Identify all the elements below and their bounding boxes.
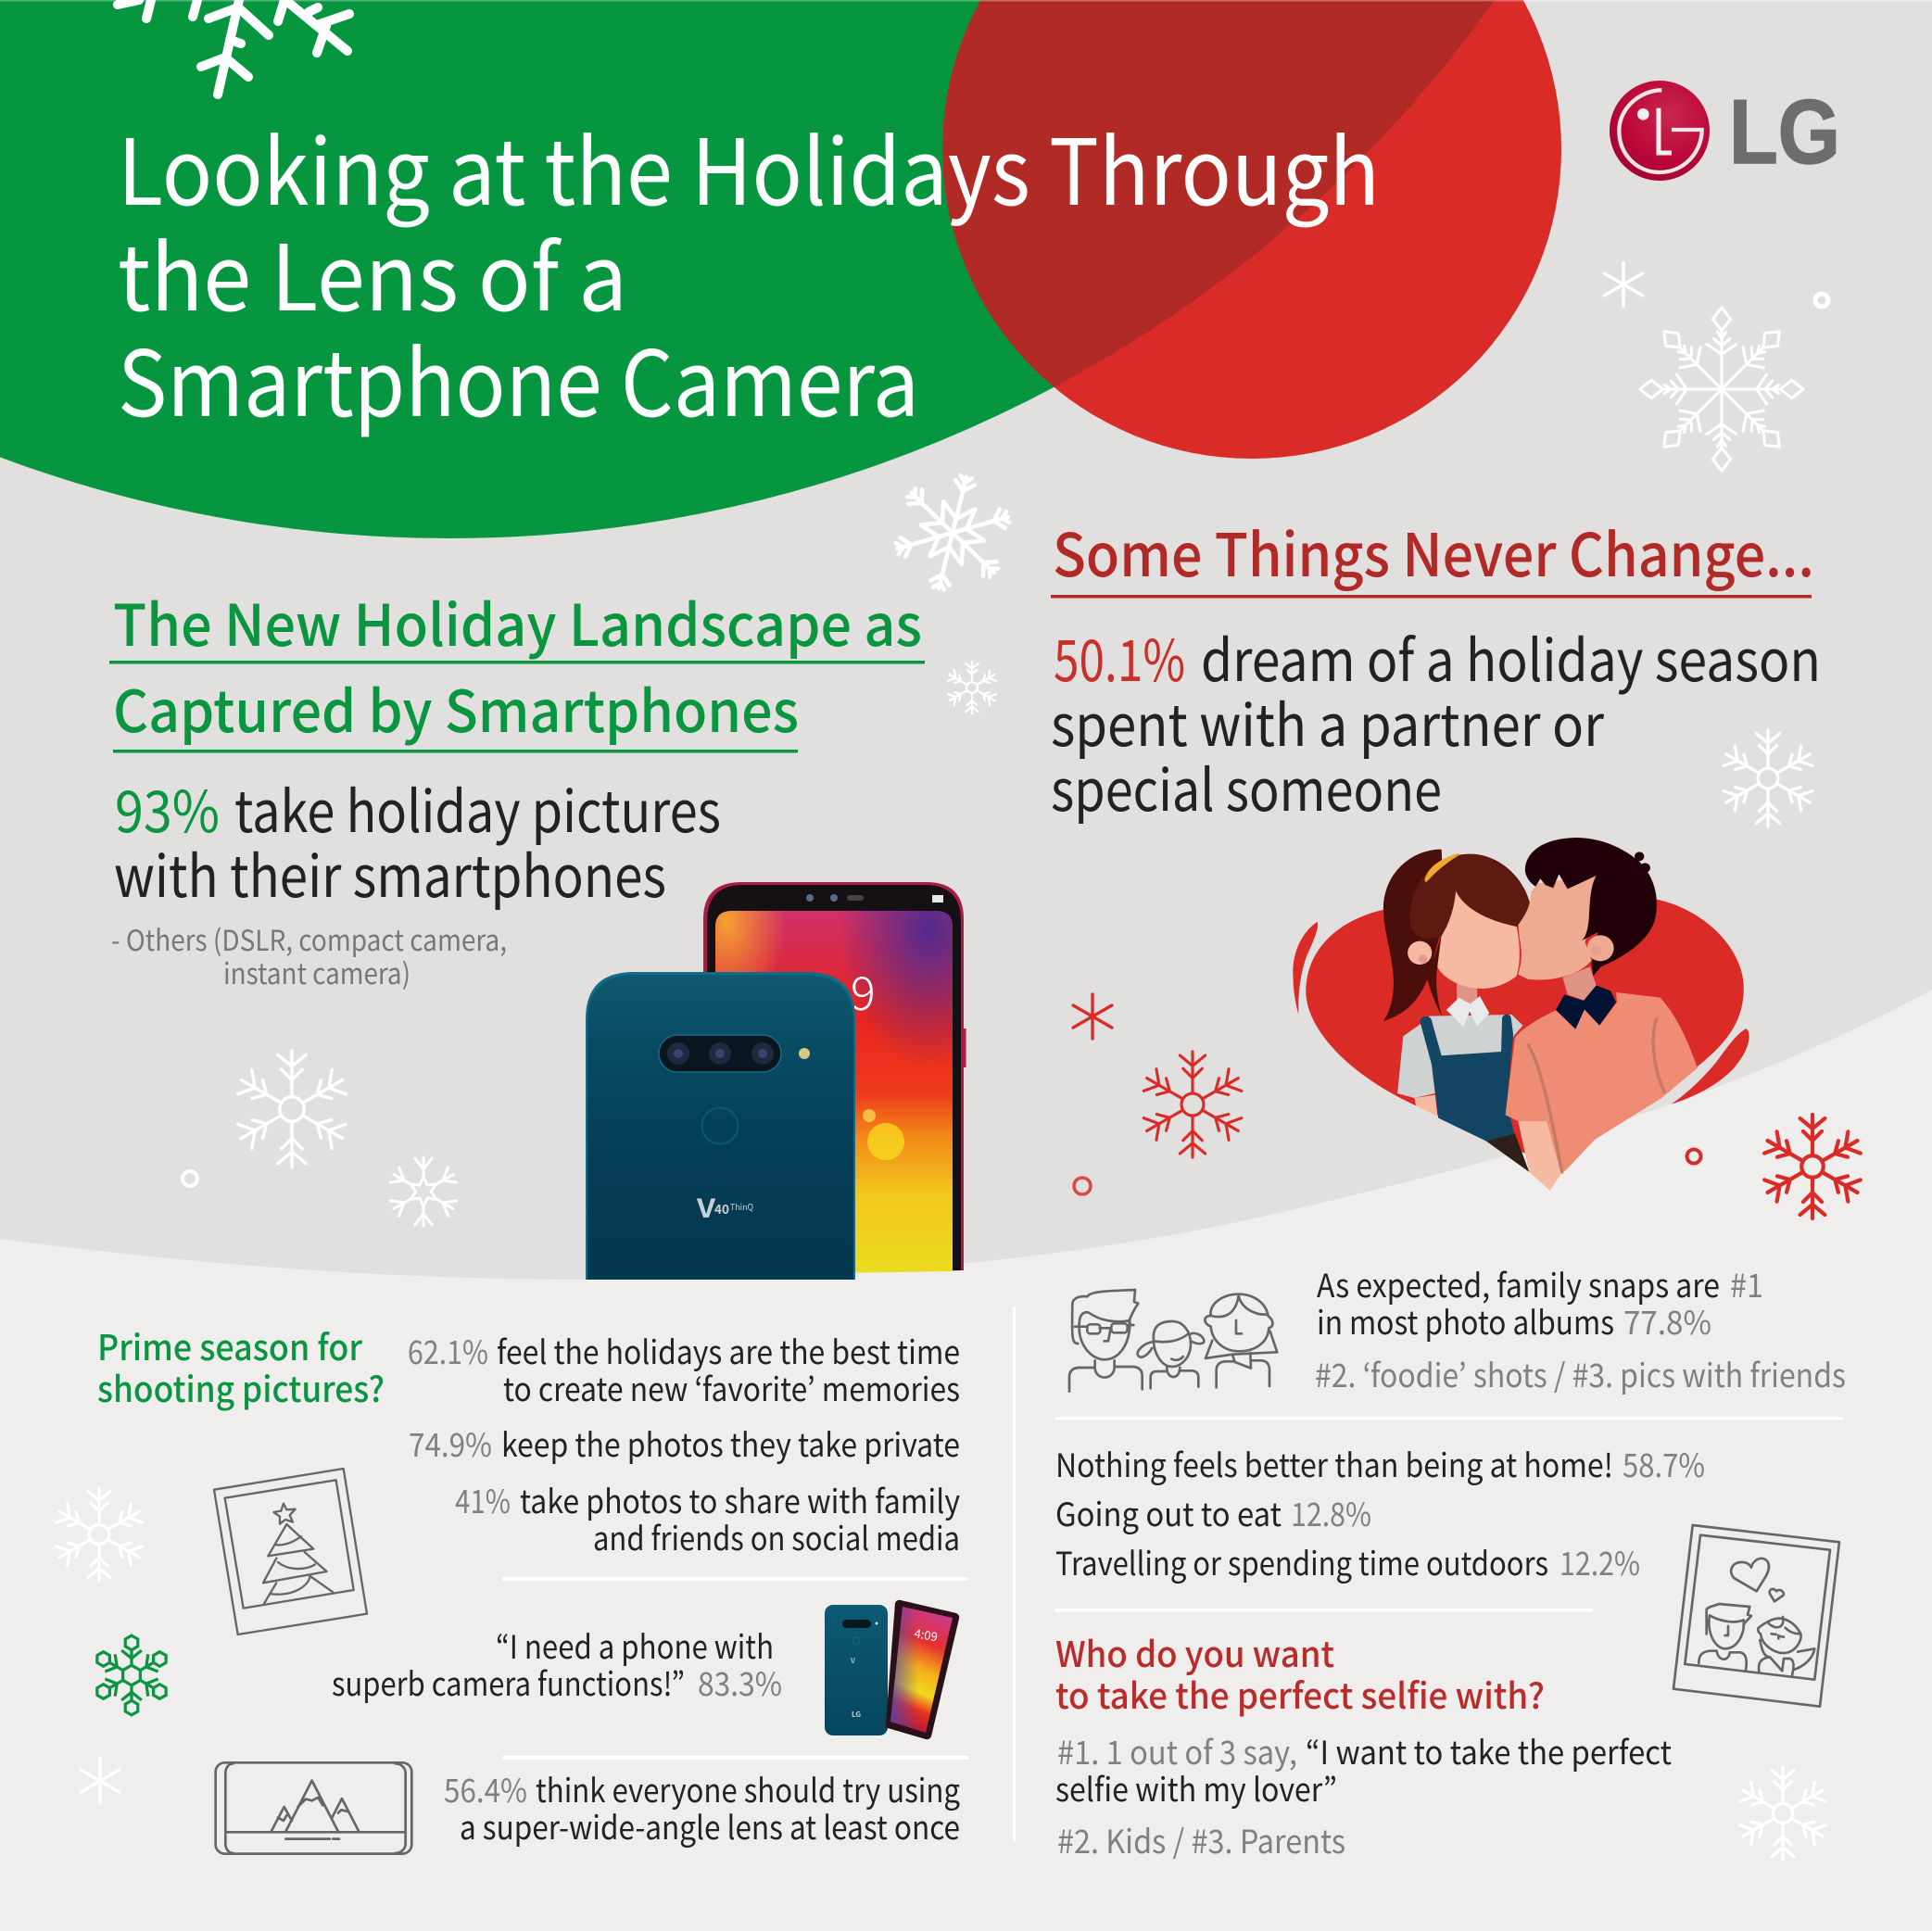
statistic: 83.3 percent quote bbox=[332, 1622, 782, 1706]
statistic: 41 percent: and friends on social media bbox=[593, 1513, 960, 1560]
heading: green two line bbox=[109, 579, 925, 752]
icon: polaroid with tree bbox=[214, 1469, 367, 1634]
statistic: 41 percent: take photos to share with family bbox=[520, 1476, 960, 1523]
statistic: 93 percent: take holiday pictures bbox=[234, 765, 721, 849]
text: family snaps: 77.8% bbox=[1623, 1297, 1711, 1344]
text: family snaps bbox=[1315, 1260, 1846, 1397]
snowflake: small lower left bbox=[389, 1157, 458, 1226]
heading: selfie question: Who do you want bbox=[1055, 1626, 1334, 1677]
statistic: 62.1 percent: to create new ‘favorite’ memories bbox=[503, 1364, 960, 1411]
snowflake: lower left bbox=[234, 1051, 349, 1167]
phone: front view bbox=[703, 882, 966, 1275]
phone: small rear: V bbox=[850, 1656, 855, 1666]
text: where people spend holidays: 58.7% bbox=[1623, 1440, 1705, 1487]
snowflake: white left bbox=[54, 1488, 145, 1581]
text: where people spend holidays bbox=[1055, 1440, 1705, 1585]
heading: prime season bbox=[97, 1319, 385, 1412]
header: green and red overlapping circles bbox=[0, 0, 1932, 538]
phones: V40 front and back bbox=[586, 882, 966, 1280]
asterisk: white left bbox=[81, 1759, 120, 1803]
snowflake: large ornate bbox=[1640, 308, 1803, 471]
text: where people spend holidays: Travelling or spending time outdoors bbox=[1055, 1538, 1548, 1585]
text: family snaps: #1 bbox=[1730, 1260, 1763, 1307]
statistic: 56.4 percent bbox=[444, 1765, 960, 1849]
heart bbox=[1306, 899, 1744, 1165]
phone: small rear: LG bbox=[852, 1710, 861, 1720]
statistic: 56.4 percent: 56.4% bbox=[444, 1765, 527, 1812]
icon: family bbox=[1069, 1290, 1277, 1392]
text: family snaps: As expected, family snaps are bbox=[1317, 1260, 1720, 1307]
heading: selfie question: to take the perfect selfie with? bbox=[1055, 1668, 1545, 1719]
phone: rear view: 40 bbox=[714, 1200, 729, 1218]
statistic: 56.4 percent: think everyone should try using bbox=[536, 1765, 960, 1812]
phone: rear view: ThinQ bbox=[730, 1201, 753, 1213]
phone: rear view: V bbox=[696, 1189, 716, 1226]
icon: polaroid with couple bbox=[1673, 1525, 1839, 1707]
title: the Lens of a bbox=[118, 206, 627, 337]
statistic: 74.9 percent: keep the photos they take private bbox=[501, 1420, 960, 1467]
statistic: 41 percent: 41% bbox=[455, 1476, 511, 1523]
title: Looking at the Holidays Through bbox=[118, 100, 1380, 232]
figures bbox=[1383, 838, 1698, 1191]
dot: lower left bbox=[183, 1171, 197, 1186]
red decorations bbox=[1073, 994, 1863, 1218]
heading: prime season: Prime season for bbox=[97, 1319, 362, 1370]
text: selfie answers bbox=[1055, 1727, 1672, 1863]
snowflake: white bottom right bbox=[1737, 1767, 1828, 1860]
logo wordmark: LG bbox=[1729, 81, 1840, 183]
note: other cameras: - Others (DSLR, compact camera, bbox=[111, 917, 507, 959]
statistic: 50.1 percent: special someone bbox=[1051, 744, 1442, 827]
icon: landscape phone with mountains bbox=[216, 1762, 411, 1854]
snowflake: red centre bbox=[1141, 1052, 1244, 1157]
icon: LG face mark bbox=[1610, 81, 1710, 181]
dot: red right bbox=[1686, 1149, 1701, 1164]
illustration: kissing couple in a heart bbox=[1293, 838, 1749, 1191]
snowflake: small beside left heading bbox=[946, 662, 998, 713]
asterisk: top right bbox=[1604, 262, 1643, 307]
phone: small front tilted bbox=[886, 1600, 959, 1739]
text: where people spend holidays: 12.2% bbox=[1559, 1538, 1640, 1585]
text: family snaps: #2. ‘foodie’ shots / #3. pics with friends bbox=[1315, 1350, 1846, 1397]
swoosh right bbox=[1672, 1029, 1749, 1104]
statistic: 74.9 percent: 74.9% bbox=[409, 1420, 492, 1467]
top snowflake, cropped by page edge bbox=[118, 0, 349, 95]
LG logo bbox=[1610, 81, 1840, 183]
white snowflakes upper area bbox=[183, 262, 1828, 1226]
statistic: 83.3 percent quote: superb camera functions!” bbox=[332, 1659, 685, 1706]
girl bbox=[1383, 850, 1531, 1172]
statistic: 56.4 percent: a super-wide-angle lens at least once bbox=[460, 1802, 960, 1849]
statistic: 83.3 percent quote: “I need a phone with bbox=[496, 1622, 774, 1669]
statistic: 62.1 percent bbox=[408, 1327, 960, 1411]
statistic: 41 percent bbox=[455, 1476, 960, 1560]
phone: front view: 9 bbox=[851, 957, 876, 1024]
note: other cameras bbox=[111, 917, 507, 992]
text: selfie answers: #1. 1 out of 3 say, bbox=[1057, 1727, 1297, 1774]
phone: small rear bbox=[825, 1605, 888, 1735]
text: where people spend holidays: 12.8% bbox=[1291, 1489, 1371, 1536]
phone: rear view bbox=[586, 972, 855, 1280]
text: where people spend holidays: Going out to eat bbox=[1055, 1489, 1282, 1536]
asterisk: red bbox=[1073, 994, 1112, 1039]
note: other cameras: instant camera) bbox=[223, 951, 410, 992]
dot: top right bbox=[1815, 294, 1828, 307]
boy bbox=[1506, 838, 1698, 1191]
panel: some things never change bbox=[1051, 509, 1821, 827]
title bbox=[118, 100, 1380, 443]
statistic: 50.1 percent bbox=[1051, 614, 1821, 827]
heading: green two line: Captured by Smartphones bbox=[113, 665, 799, 749]
statistic: 50.1 percent: 50.1% bbox=[1054, 614, 1185, 698]
lower light section with curved edge bbox=[0, 990, 1932, 1931]
heading: selfie question bbox=[1055, 1626, 1545, 1719]
text: selfie answers: #2. Kids / #3. Parents bbox=[1057, 1816, 1345, 1863]
heading: green two line: The New Holiday Landscape as bbox=[113, 579, 922, 663]
dot: red left bbox=[1074, 1178, 1091, 1194]
text: selfie answers: selfie with my lover” bbox=[1055, 1764, 1337, 1811]
statistic: 93 percent: 93% bbox=[115, 765, 220, 849]
statistic: 50.1 percent: spent with a partner or bbox=[1051, 679, 1605, 763]
statistic: 62.1 percent: 62.1% bbox=[408, 1327, 488, 1374]
heading: red: Some Things Never Change... bbox=[1053, 509, 1814, 594]
statistic: 50.1 percent: dream of a holiday season bbox=[1201, 614, 1821, 698]
statistic: 62.1 percent: feel the holidays are the best time bbox=[497, 1327, 960, 1374]
panel: family snaps and selfies bbox=[1054, 1260, 1846, 1863]
snowflake: red right bbox=[1762, 1115, 1863, 1218]
panel: prime season for shooting pictures bbox=[54, 1319, 968, 1854]
panel: the new holiday landscape bbox=[109, 579, 925, 992]
snowflake: beside right heading bbox=[882, 463, 1023, 602]
text: where people spend holidays: Nothing feels better than being at home! bbox=[1055, 1440, 1613, 1487]
statistic: 93 percent bbox=[114, 765, 721, 914]
statistic: 93 percent: with their smartphones bbox=[114, 830, 666, 914]
heading: prime season: shooting pictures? bbox=[97, 1361, 385, 1412]
text: family snaps: in most photo albums bbox=[1317, 1297, 1614, 1344]
phone: small front tilted: 4:09 bbox=[913, 1623, 939, 1645]
vertical divider between bottom columns bbox=[1013, 1306, 1016, 1842]
snowflake: right of statistic bbox=[1721, 730, 1815, 827]
title: Smartphone Camera bbox=[118, 311, 919, 443]
swoosh left bbox=[1293, 922, 1318, 1015]
small phones bbox=[825, 1600, 959, 1739]
snowflake: green hex bbox=[92, 1635, 171, 1715]
text: selfie answers: “I want to take the perfect bbox=[1306, 1727, 1672, 1774]
statistic: 83.3 percent quote: 83.3% bbox=[698, 1659, 782, 1706]
